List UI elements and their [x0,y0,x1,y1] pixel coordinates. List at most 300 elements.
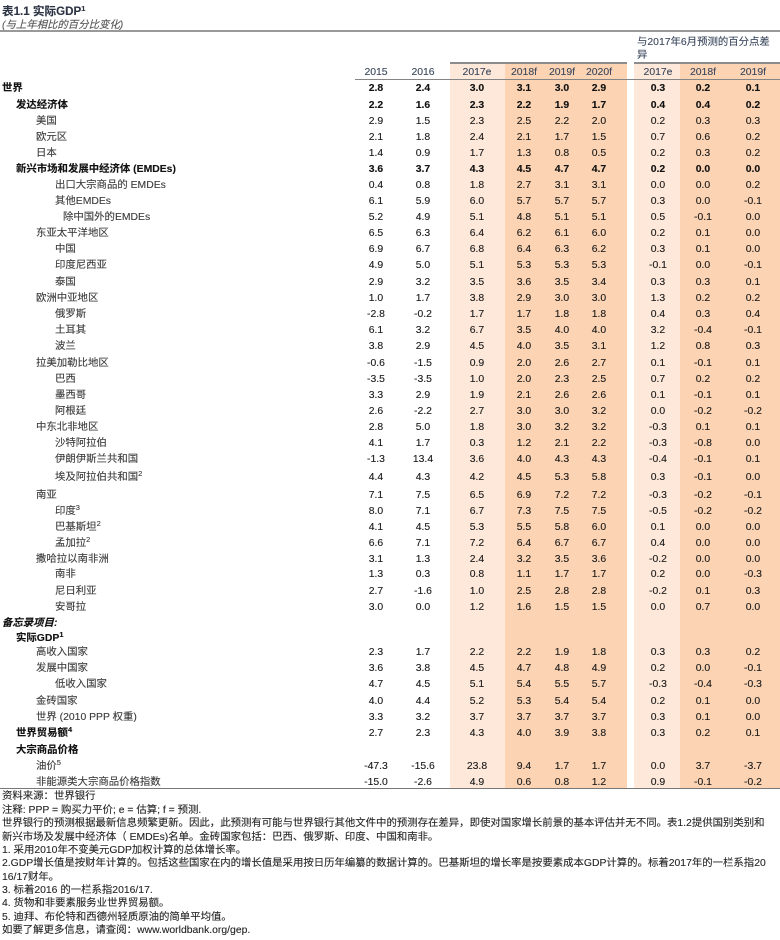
row: argentina: -2.2 [414,406,432,417]
row: oil price: 0.0 [651,761,665,772]
row: japan: 1.7 [470,148,484,159]
row: world: 0.2 [696,83,710,94]
row: south asia: -0.3 [649,490,667,501]
row: south africa: 0.2 [651,569,665,580]
abbreviation note: 注释: PPP = 购买力平价; e = 估算; f = 预测. [2,805,201,816]
row: pakistan: 0.1 [651,522,665,533]
row: indonesia [55,259,762,271]
row: indonesia: 0.0 [696,260,710,271]
column headers: 2016 [411,67,435,78]
row: world trade: 0.3 [651,728,665,739]
row: middle east north africa: 0.1 [746,422,760,433]
row: indonesia: 5.3 [555,260,569,271]
column headers: 2019f [549,67,575,78]
shaded columns: 2018f to 2019f differences [680,63,780,788]
row: world PPP weights: 3.2 [416,712,430,723]
footnotes [0,790,780,938]
row: bangladesh: 6.7 [555,538,569,549]
row: thailand: 0.3 [651,277,665,288]
column headers [364,67,766,78]
row: egypt: 5.8 [592,472,606,483]
row: high income countries: 2.3 [369,647,383,658]
row: low income countries: -0.3 [744,679,762,690]
row: thailand: 3.5 [555,277,569,288]
row: world trade: 4.3 [470,728,484,739]
row: euro area: 2.4 [470,132,484,143]
row: real GDP heading: 实际GDP1 [16,630,63,644]
row: iran: 伊朗伊斯兰共和国 [55,454,138,465]
row: russia: 1.7 [517,309,531,320]
row: other EMDEs: 0.3 [651,196,665,207]
row: advanced economies: 2.3 [470,100,484,111]
row: sub-saharan africa: 3.2 [517,554,531,565]
row: non-energy commodity index [0,775,780,791]
row: india: 7.3 [517,506,531,517]
row: sub-saharan africa: 0.0 [746,554,760,565]
row: thailand: 3.5 [470,277,484,288]
row: united states: 0.3 [746,116,760,127]
heading: difference from June 2017 forecast: 与2017年6月预测的百分点差 [637,37,770,48]
row: world PPP weights: 3.7 [555,712,569,723]
more information link text: 如要了解更多信息，请查阅：www.worldbank.org/gep. [2,925,250,936]
row: oil price: 1.7 [592,761,606,772]
row: euro area: 2.1 [369,132,383,143]
row: world PPP weights: 0.1 [696,712,710,723]
row: non-energy commodity index: 0.6 [517,777,531,788]
row: high income countries: 0.3 [696,647,710,658]
row: non-energy commodity index: 1.2 [592,777,606,788]
row: south asia: 7.1 [369,490,383,501]
row: high income countries: 2.2 [517,647,531,658]
row: argentina: 阿根廷 [55,406,86,417]
row: low income countries: -0.3 [649,679,667,690]
row: indonesia: 5.1 [470,260,484,271]
row: world: 2.9 [592,83,606,94]
row: euro area: 1.8 [416,132,430,143]
row: china: 6.3 [555,244,569,255]
row: iran: 0.1 [746,454,760,465]
bottom rule [0,788,780,789]
row: iran: 4.3 [555,454,569,465]
row: sub-saharan africa: 3.1 [369,554,383,565]
footnote 5: 5. 迪拜、布伦特和西德州轻质原油的简单平均值。 [2,912,232,923]
row: east asia pacific: 6.0 [592,228,606,239]
row: united states: 2.5 [517,116,531,127]
row: india: 8.0 [369,506,383,517]
row: developing countries: 4.7 [517,663,531,674]
row: low income countries: -0.4 [694,679,712,690]
row: developing countries: 0.2 [651,663,665,674]
row: latin america caribbean: 0.9 [470,358,484,369]
row: advanced economies: 发达经济体 [16,100,68,111]
row: brazil: -3.5 [367,374,385,385]
row: argentina: 3.2 [592,406,606,417]
shaded column: 2017e forecast [450,63,505,788]
row: developing countries [0,661,780,677]
row: developing countries: 发展中国家 [36,663,88,674]
row: euro area: 1.7 [555,132,569,143]
row: russia [55,308,760,320]
row: low income countries: 5.5 [555,679,569,690]
row: EMDEs: 0.0 [746,164,760,175]
row: united states [36,115,760,127]
row: japan: 0.8 [555,148,569,159]
row: sub-saharan africa: 3.5 [555,554,569,565]
row: world: 2.8 [369,83,383,94]
row: bangladesh: 0.0 [746,538,760,549]
row: egypt: 5.3 [555,472,569,483]
row: angola: 安哥拉 [55,602,86,613]
row: east asia pacific: 0.1 [696,228,710,239]
row: russia: -0.2 [414,309,432,320]
heading: difference from June 2017 forecast [637,36,770,61]
row: india [55,503,762,517]
row: bangladesh: 6.4 [517,538,531,549]
row: india: 7.1 [416,506,430,517]
row: other EMDEs: 5.7 [555,196,569,207]
row: india: -0.2 [744,506,762,517]
row: world trade: 世界贸易额4 [16,725,72,739]
row: world PPP weights: 0.3 [651,712,665,723]
row: turkey: 4.0 [555,325,569,336]
row: oil price: 9.4 [517,761,531,772]
row: south asia [36,489,762,501]
row: argentina: 3.0 [517,406,531,417]
header rule [355,78,780,80]
row: argentina: -0.2 [694,406,712,417]
shaded columns: 2018f to 2020f forecasts [505,63,627,788]
row: japan [36,147,760,159]
row: oil price: 油价5 [36,758,61,772]
row: sub-saharan africa: 1.3 [416,554,430,565]
row: china [55,243,760,255]
row: angola: 0.0 [651,602,665,613]
row: commodity exporters [55,179,760,191]
row: advanced economies: 2.2 [369,100,383,111]
row: europe central asia: 0.2 [696,293,710,304]
row: angola: 1.5 [592,602,606,613]
row: saudi arabia: 1.7 [416,438,430,449]
column headers: 2017e [644,67,672,78]
row: low income countries: 5.4 [517,679,531,690]
row: other EMDEs: 6.0 [470,196,484,207]
row: EMDEs: 新兴市场和发展中经济体 (EMDEs) [16,164,176,175]
row: japan: 日本 [36,148,57,159]
forecast note [2,817,780,844]
source note: 资料来源：世界银行 [2,791,96,802]
row: angola: 1.2 [470,602,484,613]
row: china: 6.8 [470,244,484,255]
row: high income countries: 1.9 [555,647,569,658]
row: high income countries: 高收入国家 [36,647,88,658]
row: turkey: 3.2 [651,325,665,336]
row: angola [55,601,760,613]
row: south africa: 0.3 [416,569,430,580]
row: BRICS: 4.0 [369,696,383,707]
row: EMDEs excluding China: 0.0 [746,212,760,223]
row: middle east north africa: 1.8 [470,422,484,433]
row: memo items heading: 备忘录项目: [2,618,57,628]
row: commodity exporters: 3.1 [555,180,569,191]
difference group rule [634,62,780,64]
row: other EMDEs: 0.0 [696,196,710,207]
row: saudi arabia: -0.3 [649,438,667,449]
row: non-energy commodity index: -2.6 [414,777,432,788]
row: sub-saharan africa: 0.0 [696,554,710,565]
row: poland: 1.2 [651,341,665,352]
row: euro area: 2.1 [517,132,531,143]
row: europe central asia: 3.0 [555,293,569,304]
row: sub-saharan africa: 3.6 [592,554,606,565]
row: united states: 0.2 [651,116,665,127]
row: sub-saharan africa: 2.4 [470,554,484,565]
row: nigeria: 2.8 [592,586,606,597]
row: low income countries: 4.5 [416,679,430,690]
row: indonesia: -0.1 [649,260,667,271]
row: brazil: 2.0 [517,374,531,385]
row: other EMDEs: 5.7 [592,196,606,207]
row: indonesia: 5.0 [416,260,430,271]
shaded column: 2017e difference [634,63,680,788]
row: oil price: 3.7 [696,761,710,772]
row: nigeria: 0.3 [746,586,760,597]
row: south africa: 1.7 [592,569,606,580]
row: advanced economies: 0.2 [746,100,760,111]
row: non-energy commodity index: -15.0 [364,777,388,788]
row: EMDEs: 4.3 [470,164,484,175]
row: thailand: 2.9 [369,277,383,288]
row: latin america caribbean: 拉美加勒比地区 [36,358,109,369]
row: other EMDEs [55,195,762,207]
row: pakistan: 4.1 [369,522,383,533]
row: brazil: 2.5 [592,374,606,385]
row: mexico: 3.3 [369,390,383,401]
row: europe central asia: 2.9 [517,293,531,304]
row: mexico: 1.9 [470,390,484,401]
row: oil price [0,759,780,775]
row: high income countries: 0.2 [746,647,760,658]
row: latin america caribbean: 2.0 [517,358,531,369]
row: india: 7.5 [592,506,606,517]
row: euro area [36,131,760,143]
row: south asia: 7.2 [592,490,606,501]
footnote 3: 3. 标着2016 的一栏系指2016/17. [2,885,153,896]
row: commodity exporters: 2.7 [517,180,531,191]
row: middle east north africa: 3.2 [592,422,606,433]
footnote 2: 2.GDP增长值是按财年计算的。包括这些国家在内的增长值是采用按日历年编纂的数据计算的。巴基斯坦的增长率是按要素成本GDP计算的。标着2017年的一栏系指20 [2,858,766,869]
row: argentina: -0.2 [744,406,762,417]
row: world: 0.3 [651,83,665,94]
row: russia: 0.4 [746,309,760,320]
row: south africa: 1.1 [517,569,531,580]
row: other EMDEs: -0.1 [744,196,762,207]
row: russia: 俄罗斯 [55,309,86,320]
row: commodity exporters: 0.0 [696,180,710,191]
row: poland: 4.0 [517,341,531,352]
row: south asia: 南亚 [36,490,57,501]
row: euro area: 0.2 [746,132,760,143]
row: EMDEs: 3.7 [416,164,430,175]
row: world: 3.0 [555,83,569,94]
row: commodity exporters: 出口大宗商品的 EMDEs [55,180,166,191]
row: latin america caribbean: -1.5 [414,358,432,369]
row: middle east north africa: 5.0 [416,422,430,433]
row: south africa [55,568,762,580]
row: europe central asia: 0.2 [746,293,760,304]
row: developing countries: 4.9 [592,663,606,674]
row: bangladesh: 0.0 [696,538,710,549]
row: russia: 0.4 [651,309,665,320]
row: sub-saharan africa: 撒哈拉以南非洲 [36,554,109,565]
row: EMDEs excluding China: 5.1 [470,212,484,223]
row: east asia pacific: 6.4 [470,228,484,239]
row: indonesia: -0.1 [744,260,762,271]
row: pakistan: 5.5 [517,522,531,533]
subtitle: (与上年相比的百分比变化) [2,20,123,31]
row: south africa: 1.3 [369,569,383,580]
row: other EMDEs: 5.7 [517,196,531,207]
row: poland [55,340,760,352]
row: advanced economies: 1.9 [555,100,569,111]
row: saudi arabia: 0.3 [470,438,484,449]
row: EMDEs: 0.2 [651,164,665,175]
column headers: 2018f [511,67,537,78]
row: world: 3.1 [517,83,531,94]
row: world: 2.4 [416,83,430,94]
row: angola: 0.7 [696,602,710,613]
row: world PPP weights: 0.0 [746,712,760,723]
footnote 4: 4. 货物和非要素服务业世界贸易额。 [2,898,169,909]
row: china: 6.7 [416,244,430,255]
row: brazil: -3.5 [414,374,432,385]
row: poland: 0.3 [746,341,760,352]
column headers: 2018f [690,67,716,78]
row: non-energy commodity index: -0.2 [744,777,762,788]
forecast note: 世界银行的预测根据最新信息频繁更新。因此，此预测有可能与世界银行其他文件中的预测存在差异，即使对国家增长前景的基本评估并无不同。表1.2提供国别类别和 [2,818,765,829]
row: pakistan: 5.8 [555,522,569,533]
row: japan: 0.5 [592,148,606,159]
column headers: 2020f [586,67,612,78]
row: advanced economies: 1.6 [416,100,430,111]
row: advanced economies [16,98,760,111]
row: japan: 0.9 [416,148,430,159]
heading: difference from June 2017 forecast: 异 [637,50,647,61]
row: east asia pacific: 6.1 [555,228,569,239]
row: non-energy commodity index: 0.9 [651,777,665,788]
row: argentina: 3.0 [555,406,569,417]
row: middle east north africa: 中东北非地区 [36,422,98,433]
row: high income countries: 1.7 [416,647,430,658]
row: japan: 0.3 [696,148,710,159]
row: indonesia: 5.3 [592,260,606,271]
row: poland: 3.8 [369,341,383,352]
row: EMDEs excluding China: 4.8 [517,212,531,223]
row: EMDEs: 4.7 [592,164,606,175]
row: oil price: -3.7 [744,761,762,772]
row: low income countries: 5.7 [592,679,606,690]
row: russia: 1.8 [592,309,606,320]
row: india: -0.2 [694,506,712,517]
row: saudi arabia: 1.2 [517,438,531,449]
row: latin america caribbean: -0.6 [367,358,385,369]
row: mexico [55,390,760,401]
row: thailand [55,276,760,288]
row: iran: 4.3 [592,454,606,465]
row: saudi arabia [55,437,760,449]
row: europe central asia: 1.0 [369,293,383,304]
row: brazil: 巴西 [55,374,76,385]
row: angola: 1.6 [517,602,531,613]
row: thailand: 0.3 [696,277,710,288]
row: thailand: 3.4 [592,277,606,288]
row: south asia: 6.5 [470,490,484,501]
row: saudi arabia: 沙特阿拉伯 [55,438,107,449]
row: world [2,82,760,94]
row: poland: 3.1 [592,341,606,352]
row: turkey: -0.4 [694,325,712,336]
row: china: 6.4 [517,244,531,255]
row: india: -0.5 [649,506,667,517]
row: poland: 波兰 [55,341,76,352]
row: sub-saharan africa [36,553,760,565]
row: latin america caribbean: 0.1 [746,358,760,369]
row: brazil: 2.3 [555,374,569,385]
row: oil price: -15.6 [411,761,435,772]
row: developing countries: -0.1 [744,663,762,674]
row: world trade [0,726,780,742]
row: nigeria [55,585,760,597]
row: non-energy commodity index: 0.8 [555,777,569,788]
row: oil price: 1.7 [555,761,569,772]
row: advanced economies: 2.2 [517,100,531,111]
row: non-energy commodity index: -0.1 [694,777,712,788]
row: europe central asia: 1.3 [651,293,665,304]
row: india: 6.7 [470,506,484,517]
row: russia: 1.8 [555,309,569,320]
row: latin america caribbean: 2.6 [555,358,569,369]
row: pakistan: 巴基斯坦2 [55,519,101,533]
row: turkey: 6.1 [369,325,383,336]
row: iran: -0.1 [694,454,712,465]
footnote 1: 1. 采用2010年不变美元GDP加权计算的总体增长率。 [2,845,246,856]
row: commodity exporters: 0.2 [746,180,760,191]
row: nigeria: 0.1 [696,586,710,597]
row: saudi arabia: 2.2 [592,438,606,449]
row: developing countries: 4.8 [555,663,569,674]
row: thailand: 3.6 [517,277,531,288]
row: turkey: 4.0 [592,325,606,336]
row: euro area: 欧元区 [36,132,67,143]
row: world PPP weights: 3.7 [470,712,484,723]
row: EMDEs [16,162,760,175]
row: argentina [55,405,762,417]
row: bangladesh [55,535,760,549]
row: east asia pacific: 0.0 [746,228,760,239]
row: brazil: 0.2 [696,374,710,385]
row: angola: 3.0 [369,602,383,613]
row: oil price: 23.8 [467,761,487,772]
row: japan: 0.2 [651,148,665,159]
row: BRICS: 金砖国家 [36,696,78,707]
column headers: 2015 [364,67,388,78]
row: united states: 1.5 [416,116,430,127]
row: latin america caribbean: -0.1 [694,358,712,369]
row: EMDEs excluding China: 5.1 [592,212,606,223]
row: east asia pacific [36,227,760,239]
row: east asia pacific: 6.2 [517,228,531,239]
row: euro area: 0.7 [651,132,665,143]
row: world: 世界 [2,83,23,94]
